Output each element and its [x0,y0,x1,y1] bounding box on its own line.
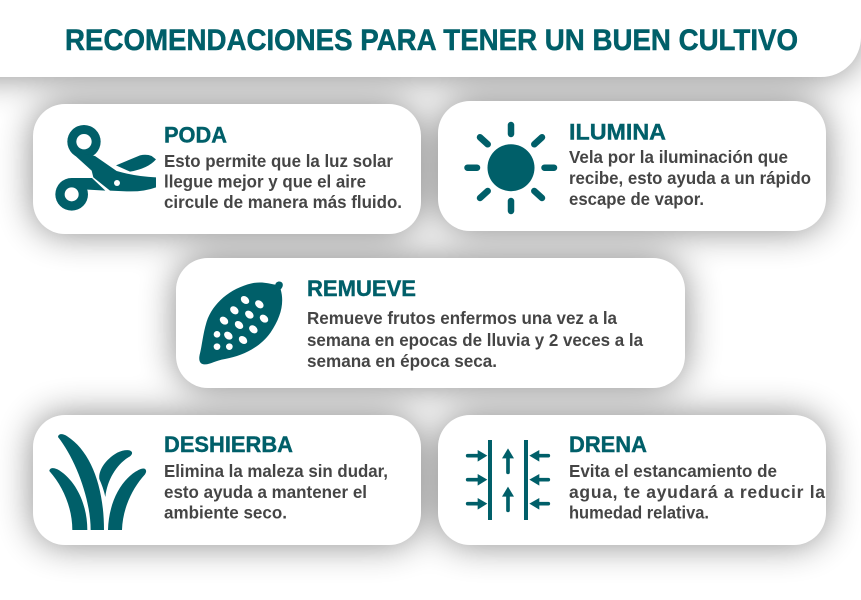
icon: sun [468,125,554,211]
body text: ilumina [569,147,811,209]
panel: poda [33,104,421,234]
panel: drena [438,415,826,545]
body text: deshierba [164,461,388,522]
title: RECOMENDACIONES PARA TENER UN BUEN CULTIVO [65,24,798,57]
heading: remueve: REMUEVE [307,276,416,301]
body text: ilumina: recibe, esto ayuda a un rápido [569,168,811,188]
body text: deshierba: Elimina la maleza sin dudar, [164,461,388,481]
body text: deshierba: esto ayuda a mantener el [164,482,367,502]
icon: cacao pod [199,282,283,364]
body text: remueve [307,308,643,371]
body text: deshierba: ambiente seco. [164,502,287,522]
heading: deshierba: DESHIERBA [164,432,293,457]
header banner [0,0,861,77]
body text: remueve: semana en época seca. [307,351,497,371]
icon: grass [49,434,146,530]
panel: ilumina [438,101,826,231]
body text: remueve: Remueve frutos enfermos una vez a la [307,308,617,328]
body text: drena [569,461,825,522]
icon: drainage arrows [468,440,548,520]
body text: poda [164,151,402,212]
panel: deshierba [33,415,421,545]
heading: ilumina: ILUMINA [569,120,666,144]
icon: scissors [55,125,156,211]
body text: drena: humedad relativa. [569,502,709,522]
body text: remueve: semana en epocas de lluvia y 2 veces a la [307,330,643,350]
body text: poda: circule de manera más fluido. [164,192,402,212]
body text: ilumina: Vela por la iluminación que [569,147,788,167]
heading: poda: PODA [164,122,227,148]
body text: poda: Esto permite que la luz solar [164,151,393,171]
heading: drena: DRENA [569,432,647,457]
panel: remueve [176,258,685,388]
body text: poda: llegue mejor y que el aire [164,172,366,192]
body text: ilumina: escape de vapor. [569,189,704,209]
body text: drena: Evita el estancamiento de [569,461,777,481]
body text: drena: agua, te ayudará a reducir la [569,482,825,502]
